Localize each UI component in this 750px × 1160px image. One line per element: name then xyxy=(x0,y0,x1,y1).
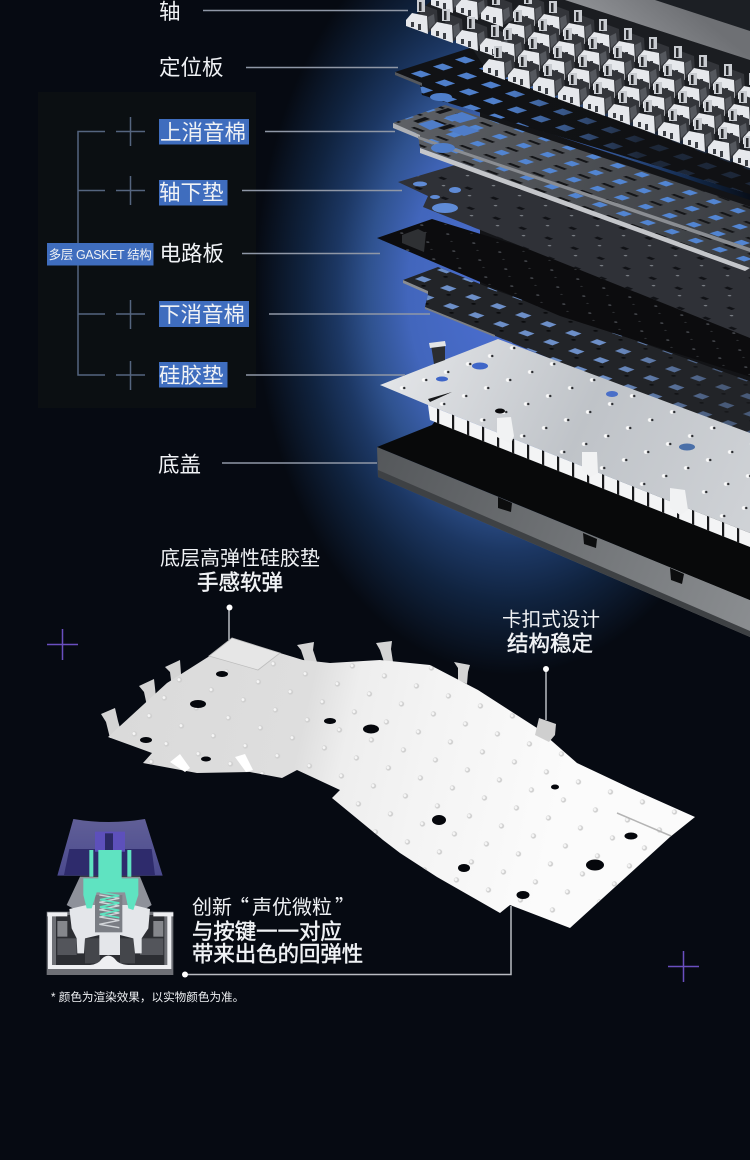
callout: silicone pad: 手感软弹 xyxy=(197,571,283,595)
label: 硅胶垫: 硅胶垫 xyxy=(159,364,224,388)
switch cross-section illustration xyxy=(47,819,173,975)
text block: sound particles: 创新 xyxy=(192,897,232,919)
keycap xyxy=(57,819,163,876)
label: 底盖: 底盖 xyxy=(158,453,201,477)
layer: silicone pad xyxy=(380,339,750,547)
panel: gasket group backdrop xyxy=(38,92,256,408)
leader lines for layer labels xyxy=(203,10,430,463)
callout: silicone pad: 底层高弹性硅胶垫 xyxy=(160,547,320,570)
layer: positioning plate xyxy=(395,48,750,194)
text block: sound particles xyxy=(192,891,363,966)
callout leader: clip xyxy=(543,666,549,720)
label: 多层 GASKET 结构 xyxy=(47,243,154,266)
text block: sound particles: 带来出色的回弹性 xyxy=(192,942,363,966)
teal stem xyxy=(83,850,138,910)
layer: lower foam xyxy=(403,267,750,445)
layer: circuit board xyxy=(377,219,750,380)
footnote: * 颜色为渲染效果，以实物颜色为准。 xyxy=(51,990,244,1004)
icon: purple plus right xyxy=(668,951,699,982)
callout: silicone pad xyxy=(160,547,320,595)
spring xyxy=(99,895,119,928)
label: 下消音棉: 下消音棉 xyxy=(159,303,245,327)
front clip tab xyxy=(535,718,556,742)
layer backing: closes gaps between stacked layers xyxy=(480,110,750,432)
blue glow behind exploded keyboard xyxy=(255,0,750,675)
text block: sound particles: 声优微粒 xyxy=(252,896,332,919)
layer: top keycap plate xyxy=(565,0,750,60)
layer: switch pad xyxy=(398,165,750,342)
layer: upper foam xyxy=(393,105,750,272)
label: 轴: 轴 xyxy=(159,0,181,24)
text block: sound particles: ” xyxy=(335,891,355,920)
base xyxy=(47,912,173,975)
layer: bottom case xyxy=(377,415,750,637)
icon: purple plus left xyxy=(47,629,78,660)
layer: switches xyxy=(406,0,750,170)
text block: sound particles: 与按键一一对应 xyxy=(192,920,342,944)
callout: clip design: 卡扣式设计 xyxy=(502,609,600,631)
callout: clip design xyxy=(502,609,600,656)
callout leader: pad corner xyxy=(226,604,232,640)
label: 定位板: 定位板 xyxy=(159,56,224,80)
silicone pad illustration xyxy=(101,638,695,928)
label: 电路板: 电路板 xyxy=(160,242,224,266)
label: 多层 GASKET 结构: 多层 GASKET 结构 xyxy=(49,247,151,262)
raised corner patch xyxy=(209,638,280,670)
exploded keyboard layers xyxy=(377,0,750,637)
callout leader: sound particles xyxy=(182,906,511,978)
label: 上消音棉: 上消音棉 xyxy=(160,121,246,145)
callout: clip design: 结构稳定 xyxy=(507,632,593,656)
housing xyxy=(67,877,152,912)
gasket bracket xyxy=(78,117,145,390)
text block: sound particles: “ xyxy=(229,891,249,920)
clip tabs xyxy=(101,641,470,738)
label: 轴下垫: 轴下垫 xyxy=(159,181,224,205)
holes xyxy=(140,671,638,899)
